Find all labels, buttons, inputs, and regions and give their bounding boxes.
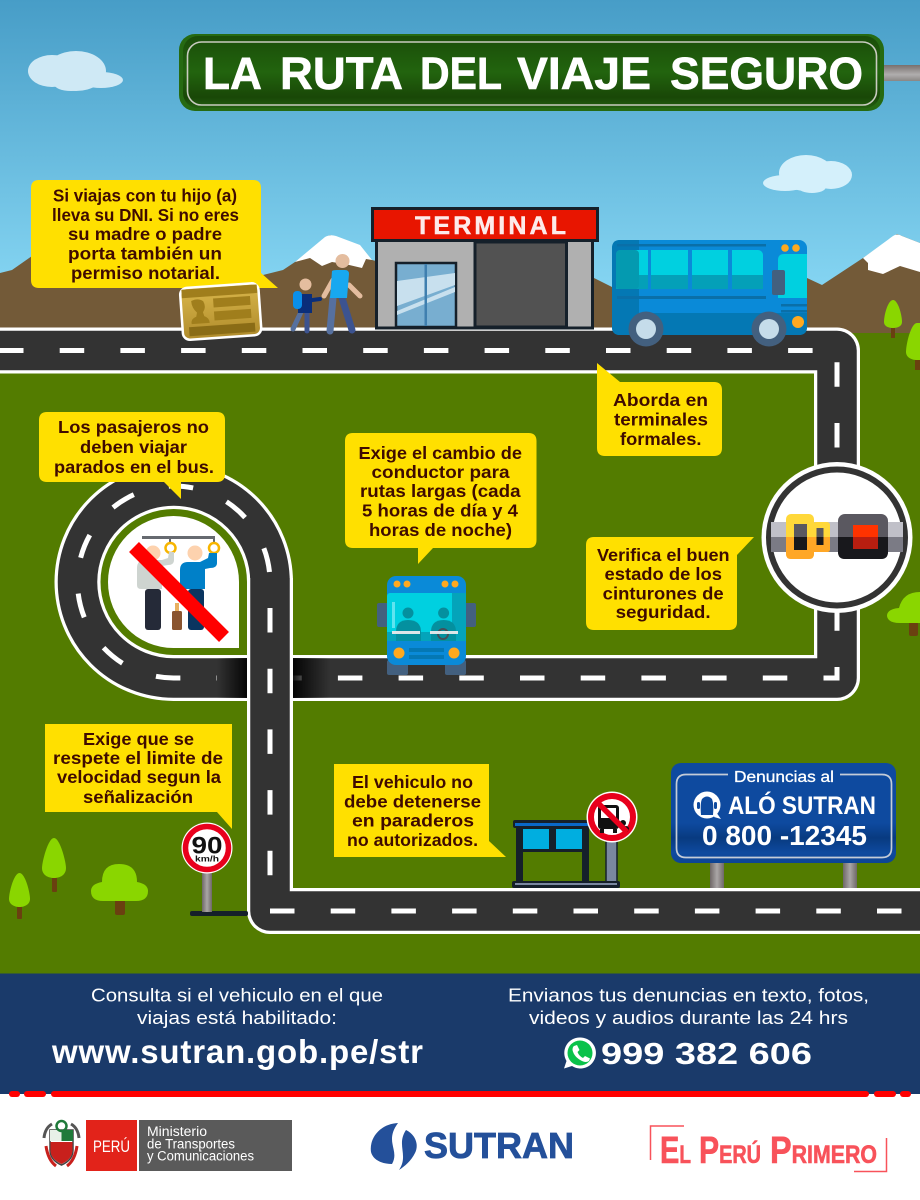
icon: whatsapp: [564, 1037, 596, 1068]
road network: [0, 350, 920, 911]
logo: El Perú Primero: PRIMERO: [770, 1130, 877, 1172]
logo: Peru ministry: de Transportes: [147, 1136, 235, 1152]
trees top right: [884, 300, 920, 370]
tree right bushy: [887, 592, 920, 636]
title sign: LA: [203, 48, 262, 99]
icon: ID card: [180, 283, 262, 340]
panel: denuncias sign: ALÓ SUTRAN: [728, 790, 876, 820]
white logo strip: [0, 1094, 920, 1200]
trees bottom left: [9, 838, 148, 919]
callout: cinturones: Verifica el buen: [597, 545, 730, 565]
cloud right: [763, 155, 852, 193]
footer left text: viajas está habilitado:: [137, 1008, 337, 1028]
title sign: VIAJE: [517, 48, 651, 99]
logo: Peru ministry: [86, 1120, 292, 1171]
cloud left: [28, 51, 123, 91]
callout: DNI: permiso notarial.: [71, 263, 220, 283]
callout: límite de velocidad: velocidad segun la: [57, 767, 221, 787]
callout: cinturones: estado de los: [604, 564, 722, 584]
panel: denuncias sign: Denuncias al: [734, 769, 834, 786]
panel: denuncias sign: [671, 763, 896, 863]
footer right text: Envianos tus denuncias en texto, fotos,: [508, 986, 869, 1006]
callout: cambio de conductor: conductor para: [372, 462, 510, 482]
callout: paraderos: El vehiculo no: [352, 772, 473, 792]
callout: cinturones: cinturones de: [603, 583, 724, 603]
title sign: DEL: [420, 48, 502, 99]
terminal building: [372, 208, 598, 328]
callout: cinturones: seguridad.: [616, 602, 711, 622]
footer band: [0, 974, 920, 1094]
no stopping sign: [586, 792, 638, 842]
footer right text: [508, 986, 869, 1071]
callout: DNI: su madre o padre: [68, 224, 222, 244]
callout: pasajeros: deben viajar: [80, 437, 187, 457]
callout: aborda en terminales: [597, 363, 722, 456]
sky background: [0, 0, 920, 340]
logo: SUTRAN: [371, 1123, 574, 1170]
callout: cinturones: [586, 537, 754, 630]
callout: pasajeros: [39, 412, 225, 499]
callout: aborda en terminales: terminales: [614, 410, 708, 430]
bus side view: [612, 240, 807, 346]
callout: paraderos: [334, 764, 506, 857]
bus stop: [512, 820, 620, 888]
title sign: RUTA: [280, 48, 403, 99]
callout: límite de velocidad: [45, 724, 232, 829]
callout: aborda en terminales: formales.: [620, 429, 702, 449]
terminal building: TERMINAL: [415, 212, 566, 240]
footer left text: Consulta si el vehiculo en el que: [91, 986, 383, 1006]
callout: límite de velocidad: Exige que se: [83, 729, 194, 749]
callout: DNI: Si viajas con tu hijo (a): [53, 186, 237, 206]
footer left text: [51, 986, 423, 1070]
callout: cambio de conductor: Exige el cambio de: [358, 443, 522, 463]
logo: SUTRAN: SUTRAN: [424, 1125, 574, 1166]
callout: cambio de conductor: horas de noche): [369, 520, 512, 540]
panel: standing passengers prohibited: [108, 516, 239, 648]
callout: límite de velocidad: señalización: [83, 787, 193, 807]
callout: paraderos: en paraderos: [352, 811, 474, 831]
footer right text: 999 382 606: [601, 1036, 812, 1071]
callout: DNI: porta también un: [68, 244, 222, 264]
logo: El Perú Primero: PERÚ: [699, 1130, 761, 1172]
callout: cambio de conductor: [345, 433, 536, 564]
callout: pasajeros: Los pasajeros no: [58, 417, 209, 437]
logo: Peru ministry: PERÚ: [93, 1137, 130, 1156]
icon: headset: [694, 792, 721, 819]
callout: cambio de conductor: 5 horas de día y 4: [362, 501, 518, 521]
callout: paraderos: no autorizados.: [347, 830, 478, 850]
logo: Peru coat of arms: [44, 1121, 79, 1166]
logo: El Perú Primero: EL: [660, 1130, 691, 1172]
callout: límite de velocidad: respete el limite de: [53, 748, 223, 768]
callout: DNI: lleva su DNI. Si no eres: [52, 205, 239, 225]
callout: pasajeros: parados en el bus.: [54, 457, 214, 477]
icon: seat belt circle: [762, 462, 912, 613]
title sign post: [882, 65, 920, 81]
footer left text: www.sutran.gob.pe/str: [51, 1033, 423, 1070]
mountains: [0, 234, 920, 340]
title sign: SEGURO: [670, 48, 863, 99]
logo: El Perú Primero: [650, 1126, 886, 1172]
logo: Peru ministry: y Comunicaciones: [147, 1148, 254, 1164]
sign posts: [710, 860, 857, 888]
icon: adult and child walking: [293, 254, 360, 331]
panel: denuncias sign: 0 800 -12345: [702, 820, 867, 851]
red footer bar: [9, 1091, 911, 1097]
title sign: [179, 34, 884, 111]
footer right text: videos y audios durante las 24 hrs: [529, 1008, 848, 1028]
callout: paraderos: debe detenerse: [344, 792, 481, 812]
callout: cambio de conductor: rutas largas (cada: [360, 481, 521, 501]
bus front view: [377, 576, 476, 675]
callout: aborda en terminales: Aborda en: [613, 390, 708, 410]
logo: Peru ministry: Ministerio: [147, 1124, 207, 1139]
ground: [0, 333, 920, 974]
speed limit sign: [182, 822, 248, 916]
speed limit sign: 90: [192, 832, 222, 860]
callout: DNI: [31, 180, 278, 288]
speed limit sign: km/h: [195, 854, 219, 864]
